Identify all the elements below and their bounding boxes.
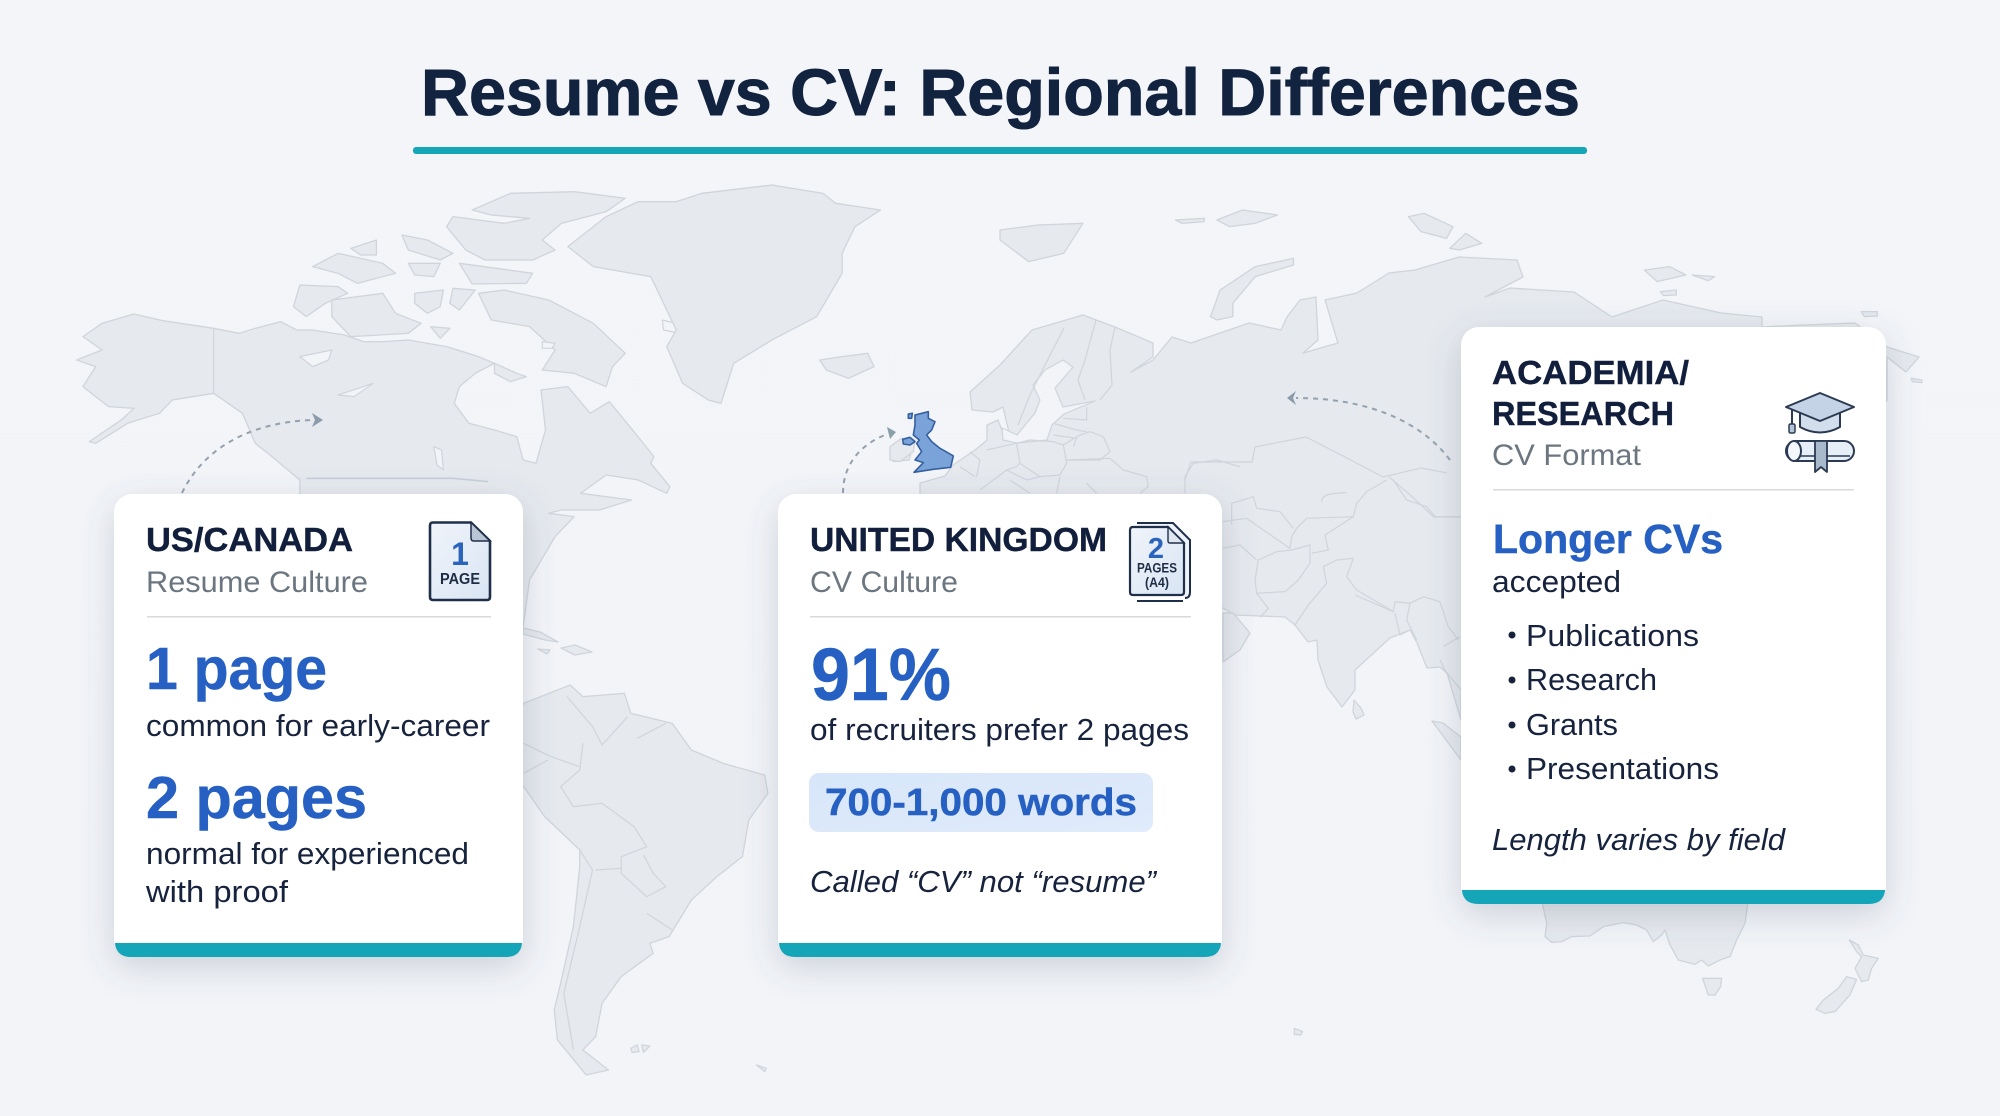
South America <box>500 685 1303 1075</box>
world map background <box>77 185 1922 1075</box>
accent bar <box>1462 890 1885 904</box>
heading: UNITED KINGDOM <box>810 521 1107 558</box>
heading: RESEARCH <box>1492 395 1674 432</box>
icon: two page document: PAGES <box>1137 560 1177 576</box>
title: Resume vs CV: Regional Differences <box>421 55 1580 129</box>
stat label continued: with proof <box>145 874 288 909</box>
North America <box>77 192 679 627</box>
subheading: Resume Culture <box>146 566 368 599</box>
word count badge: 700-1,000 words <box>825 782 1137 824</box>
Greenland, Iceland and Ireland <box>568 185 912 462</box>
icon: two page document <box>1130 523 1190 601</box>
bullet list: Publications <box>1526 618 1699 653</box>
heading <box>1492 354 1689 432</box>
word count badge <box>809 773 1153 832</box>
Eurasia <box>920 257 1919 760</box>
note: Called “CV” not “resume” <box>810 864 1158 899</box>
accent bar <box>115 943 522 957</box>
stat: 2 pages: 2 pages <box>146 765 367 831</box>
Australia and New Zealand <box>1542 900 1878 1013</box>
icon: one page document <box>430 522 490 600</box>
heading: ACADEMIA/ <box>1492 354 1689 391</box>
stat label: normal for experienced <box>146 836 469 871</box>
panel: United Kingdom <box>778 494 1222 957</box>
Scandinavia and Russia borders <box>1018 320 1115 425</box>
panel: US/Canada <box>114 494 523 957</box>
icon: one page document: 1 <box>451 536 469 572</box>
Caribbean islands <box>523 628 592 655</box>
bullet list: Research <box>1526 662 1657 697</box>
icon: graduation cap and diploma <box>1786 393 1854 472</box>
accent bar <box>779 943 1221 957</box>
stat: longer CVs: Longer CVs <box>1493 516 1723 562</box>
stat: 1 page: 1 page <box>146 636 327 702</box>
Europe borders <box>960 407 1240 493</box>
stat: 91%: 91% <box>811 633 951 716</box>
bullet list: Presentations <box>1526 751 1719 786</box>
Central and South Asia borders <box>1223 480 1460 673</box>
title underline <box>413 147 1587 154</box>
note: Length varies by field <box>1492 822 1787 857</box>
panel: Academia/Research <box>1461 327 1886 904</box>
stat label: of recruiters prefer 2 pages <box>810 712 1189 747</box>
Arctic islands of Russia <box>1000 210 1922 383</box>
heading: US/CANADA <box>146 521 353 558</box>
bullet list: Grants <box>1526 707 1618 742</box>
stat label: common for early-career <box>146 708 490 743</box>
connector arrow: US/Canada <box>182 413 323 493</box>
stat label: accepted <box>1492 564 1621 599</box>
subheading: CV Format <box>1492 439 1642 472</box>
subheading: CV Culture <box>810 566 958 599</box>
United Kingdom highlight <box>890 412 953 472</box>
connector arrow: Academia <box>1287 391 1450 460</box>
icon: two page document: 2 <box>1148 533 1164 565</box>
icon: one page document: PAGE <box>440 571 480 588</box>
bullet list <box>1508 618 1719 786</box>
icon: two page document: (A4) <box>1145 575 1169 590</box>
connector arrow: United Kingdom <box>843 427 896 493</box>
